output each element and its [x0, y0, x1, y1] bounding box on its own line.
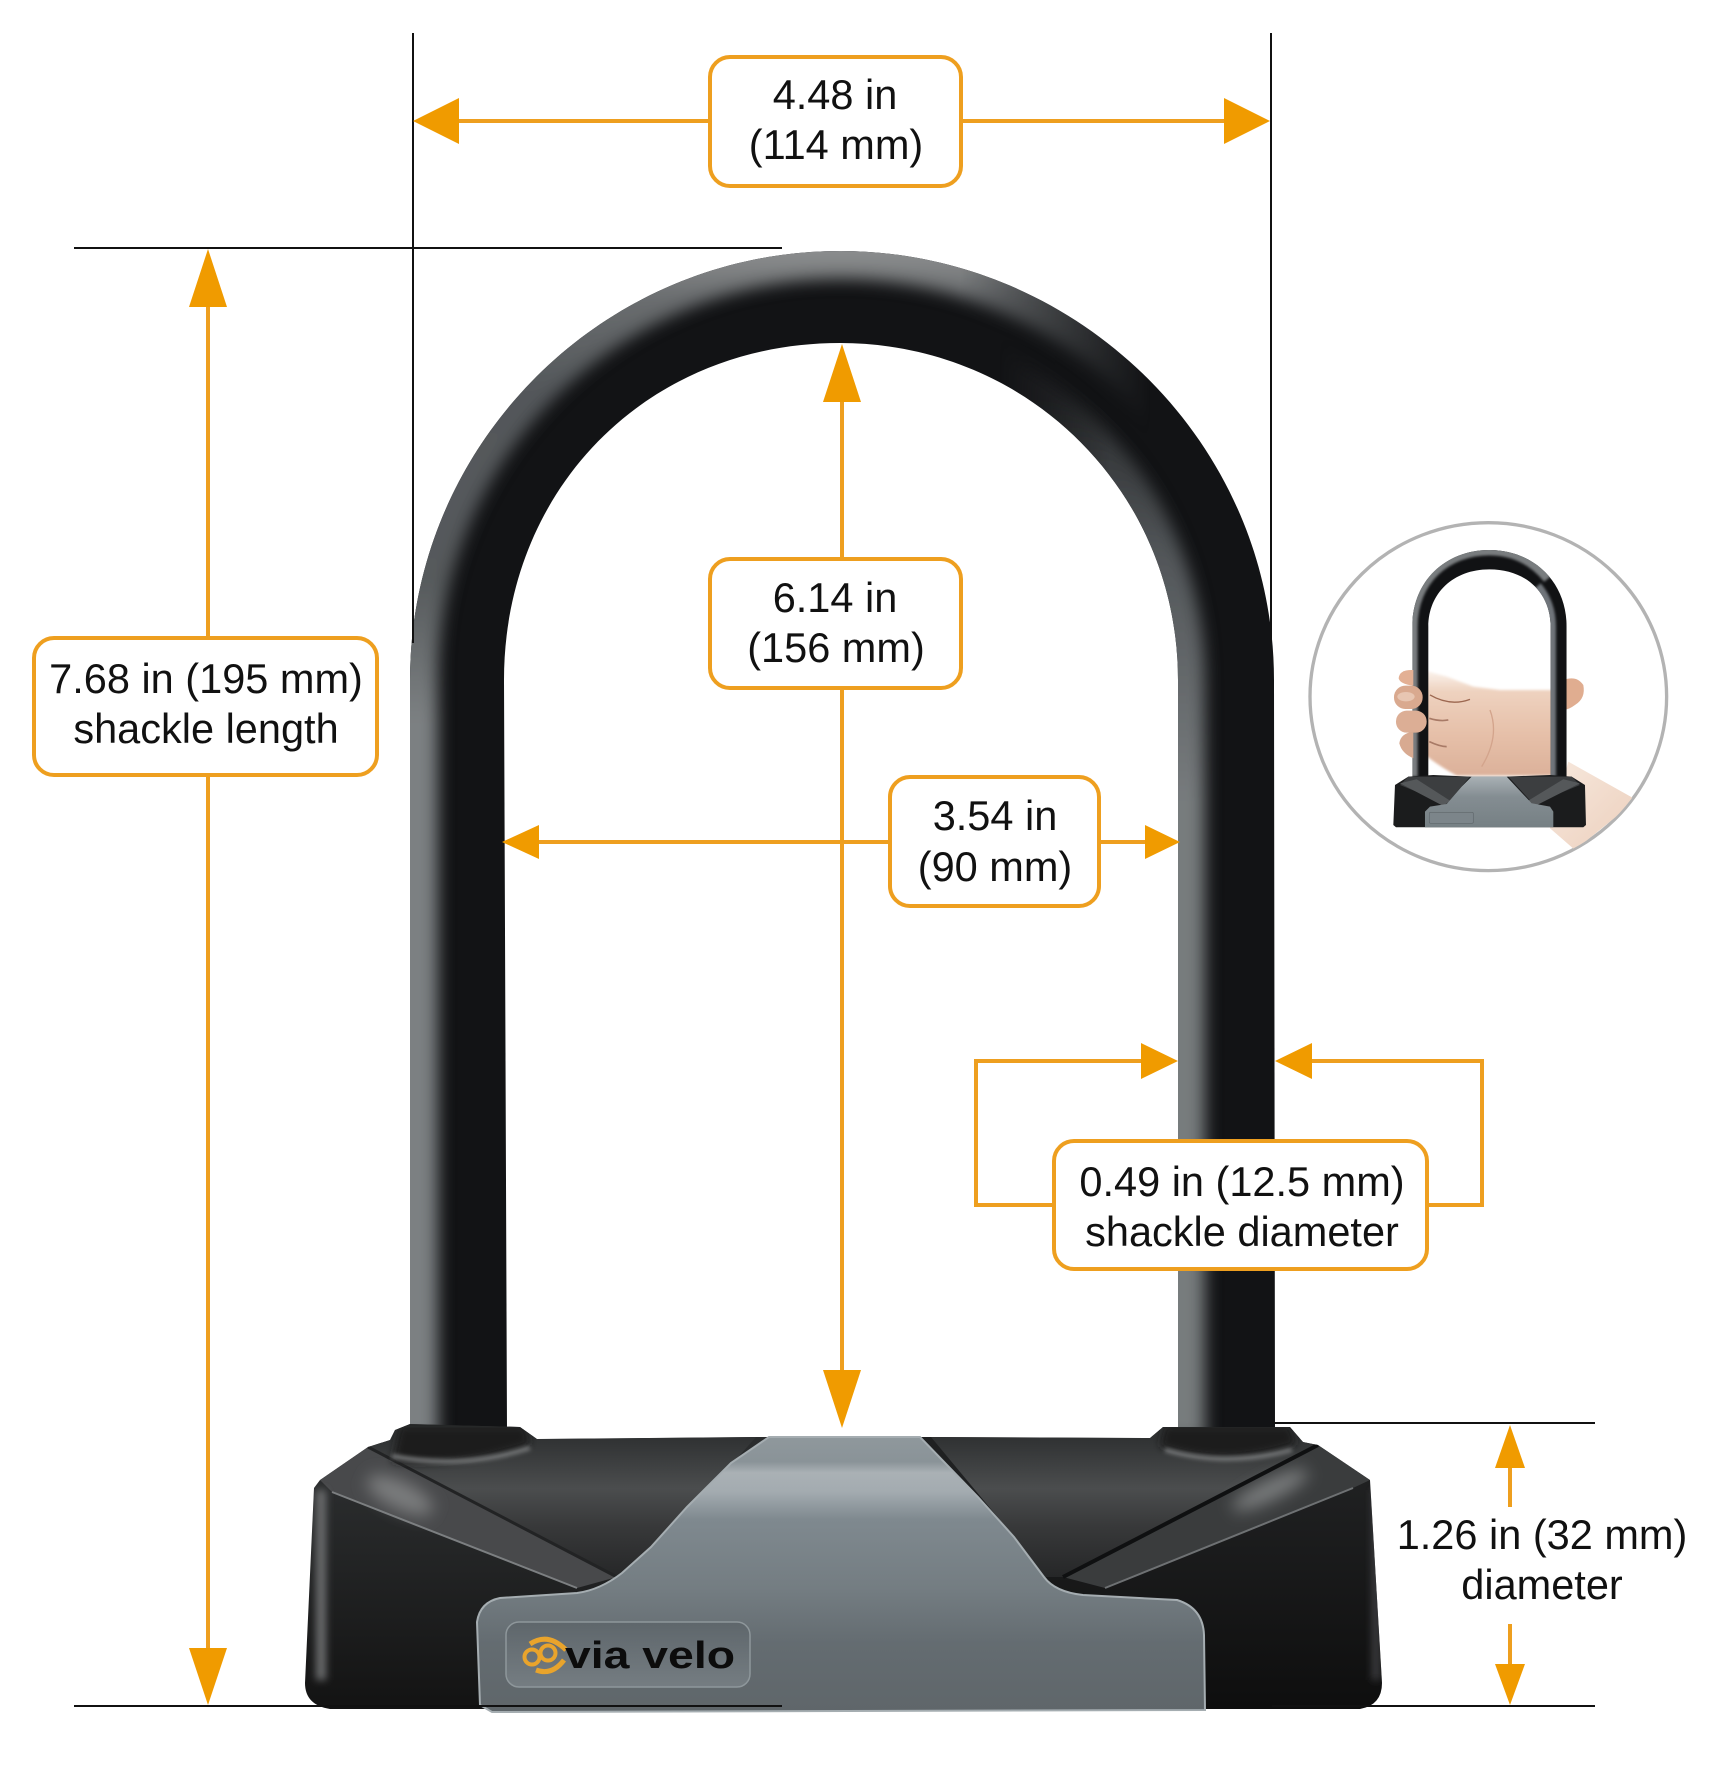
callout: 4.48 in	[710, 57, 961, 186]
callout: 3.54 in	[890, 777, 1099, 906]
extension line: top of lock body	[1272, 1422, 1595, 1424]
extension line: top of shackle	[74, 247, 782, 249]
fingers gripping the shackle	[1394, 670, 1427, 758]
callout: 4.48 in: 4.48 in	[773, 71, 897, 118]
label: 1.26 in: diameter	[1461, 1561, 1623, 1608]
grey centre cover	[477, 1437, 1205, 1712]
callout: 6.14 in: (156 mm)	[747, 624, 925, 671]
extension line: bottom of lock, right	[1272, 1705, 1595, 1707]
callout: 7.68 in: shackle length	[73, 705, 339, 752]
shackle	[400, 240, 1290, 1440]
callout: 7.68 in	[34, 638, 377, 775]
extension line: shackle left edge	[412, 33, 414, 643]
mini shackle	[1407, 547, 1573, 780]
mini lock body	[1393, 775, 1586, 827]
diagonal band left	[320, 1447, 617, 1588]
logo plate	[506, 1622, 750, 1687]
callout: 6.14 in	[710, 559, 961, 688]
upper panel right	[931, 1427, 1318, 1577]
label: 1.26 in	[1397, 1511, 1687, 1608]
callout: 0.49 in	[1054, 1141, 1427, 1269]
wrist, palm and thumb	[1425, 671, 1637, 850]
edge highlights	[316, 1490, 326, 1680]
extension line: shackle right edge	[1270, 33, 1272, 643]
dimension: inner width arrow	[502, 825, 1180, 859]
inset: hand scale circle	[1310, 523, 1667, 871]
dimension: outer width arrow	[413, 98, 1270, 144]
dimension: inner length arrow	[823, 344, 861, 1428]
diagonal band right	[1063, 1445, 1370, 1588]
collars	[392, 1426, 530, 1463]
callout: 0.49 in: shackle diameter	[1085, 1208, 1399, 1255]
upper panel left	[368, 1424, 756, 1577]
lock body	[300, 1420, 1390, 1715]
callout: 7.68 in: 7.68 in (195 mm)	[49, 655, 363, 702]
callout: 4.48 in: (114 mm)	[749, 121, 923, 168]
callout: 3.54 in: (90 mm)	[918, 843, 1072, 890]
dimension: shackle diameter brackets	[976, 1043, 1482, 1205]
extension line: bottom of lock, left	[74, 1705, 782, 1707]
inset circle outline	[1310, 523, 1667, 871]
dimension: body height arrows	[1495, 1425, 1525, 1705]
callout: 3.54 in: 3.54 in	[933, 792, 1057, 839]
callout: 6.14 in: 6.14 in	[773, 574, 897, 621]
dimension: shackle length arrow	[189, 249, 227, 1705]
callout: 0.49 in: 0.49 in (12.5 mm)	[1079, 1158, 1405, 1205]
U-lock product illustration	[300, 240, 1390, 1715]
logo mark	[524, 1639, 566, 1672]
label: 1.26 in: 1.26 in (32 mm)	[1397, 1511, 1687, 1558]
logo wordmark: via velo	[565, 1635, 735, 1677]
